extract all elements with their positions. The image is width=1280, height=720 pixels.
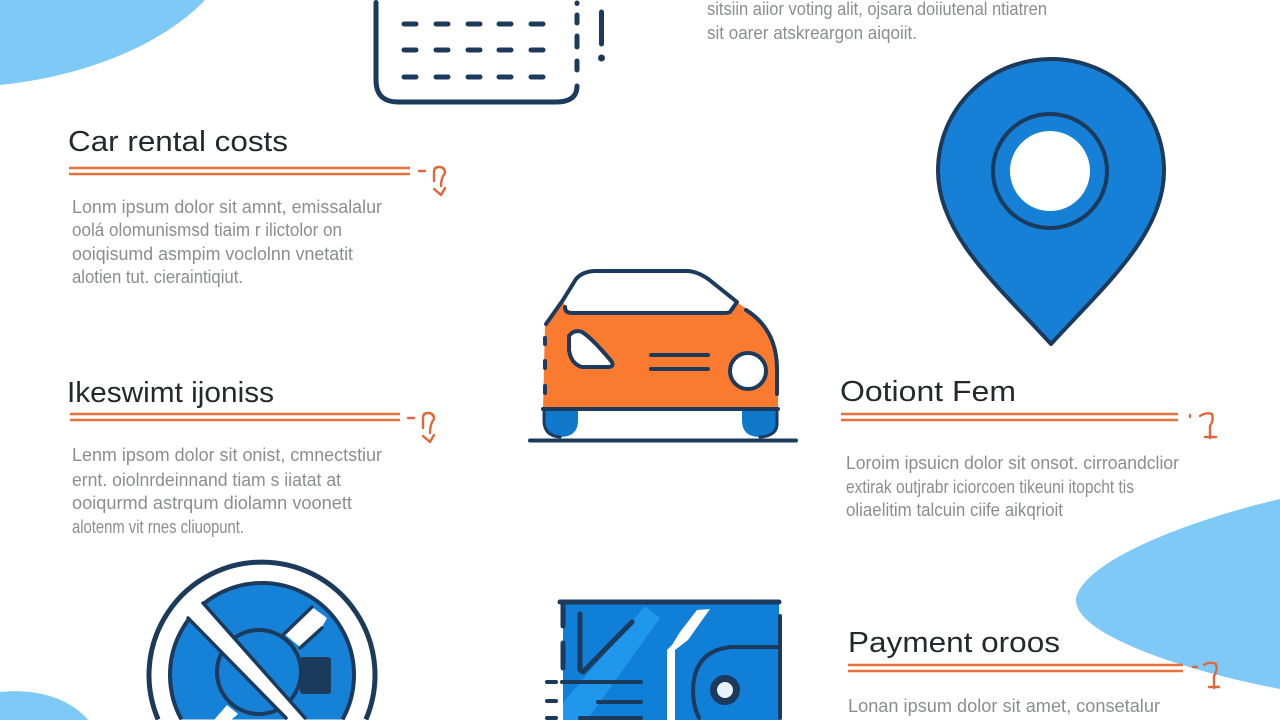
body text: alotien tut. cieraintiqiut. bbox=[72, 267, 243, 287]
body text bbox=[846, 453, 1179, 520]
panel: option item bbox=[840, 376, 1216, 520]
text: top right bbox=[707, 0, 1047, 43]
body text: ernt. oiolnrdeinnand tiam s iiatat at bbox=[72, 470, 341, 490]
panel: discount options bbox=[67, 377, 434, 537]
body text: ooiqisumd asmpim voclolnn vnetatit bbox=[72, 244, 353, 264]
divider with ornament bbox=[848, 663, 1219, 688]
panel: car rental costs bbox=[68, 126, 445, 287]
body text: oliaelitim talcuin ciife aikqrioit bbox=[846, 500, 1063, 520]
blob: top left bbox=[0, 0, 205, 85]
text: top right: sit oarer atskreargon aiqoiit. bbox=[707, 23, 917, 43]
body text: Lenm ipsom dolor sit onist, cmnectstiur bbox=[72, 445, 382, 465]
blob: bottom left bbox=[0, 691, 88, 720]
body text bbox=[72, 197, 382, 287]
icon: no-entry steering wheel bbox=[149, 562, 375, 720]
body text: Lonm ipsum dolor sit amnt, emissalalur bbox=[72, 197, 382, 217]
divider with ornament bbox=[841, 413, 1216, 438]
body text: Loroim ipsuicn dolor sit onsot. cirroandclior bbox=[846, 453, 1179, 473]
body text: alotenm vit rnes cliuopunt. bbox=[72, 517, 244, 537]
body text: extirak outjrabr iciorcoen tikeuni itopcht tis bbox=[846, 477, 1134, 497]
heading: option item: Ootiont Fem bbox=[840, 376, 1016, 408]
body text: ooiqurmd astrqum diolamn voonett bbox=[72, 493, 352, 513]
body text: oolá olomunismsd tiaim r ilictolor on bbox=[72, 220, 342, 240]
heading: payment options: Payment oroos bbox=[848, 627, 1060, 659]
body text bbox=[72, 445, 382, 537]
blob: right bbox=[1076, 499, 1280, 689]
divider with ornament bbox=[69, 167, 445, 195]
panel: payment options bbox=[848, 627, 1219, 716]
icon: calendar bbox=[376, 2, 605, 102]
heading: discount options: Ikeswimt ijoniss bbox=[67, 377, 274, 409]
body text: Lonan ipsum dolor sit amet, consetalur bbox=[848, 696, 1160, 716]
divider with ornament bbox=[70, 413, 434, 442]
icon: wallet bbox=[547, 602, 780, 720]
icon: car bbox=[530, 271, 796, 440]
icon: location pin bbox=[938, 59, 1164, 344]
heading: car rental costs: Car rental costs bbox=[68, 126, 288, 158]
